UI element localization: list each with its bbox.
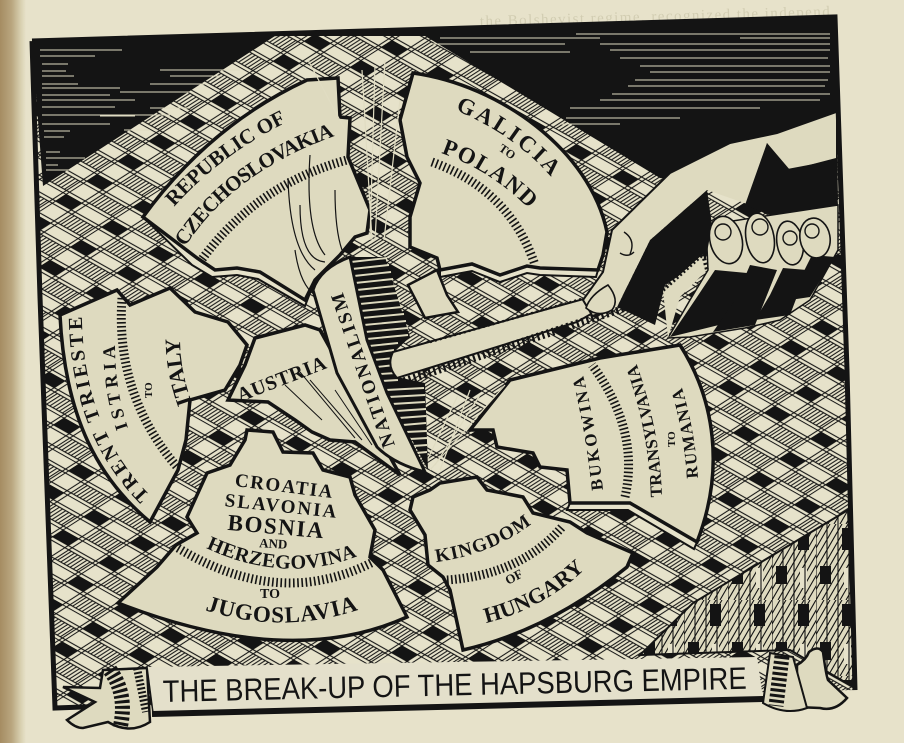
- title text: THE BREAK-UP OF THE HAPSBURG EMPIRE: [162, 661, 747, 709]
- table side face: [640, 510, 855, 688]
- shard: Austria: [225, 323, 402, 476]
- title banner: [147, 657, 764, 714]
- shard: Galicia to Poland: POLAND: [442, 139, 536, 206]
- shard: Bukowina, Transylvania to Rumania: TO: [666, 431, 678, 447]
- shard: Trent, Trieste, Istria to Italy: TRENT TRIESTE: [68, 318, 148, 504]
- shard: Croatia, Slavonia, Bosnia, Herzegovina to Jugoslavia: HERZEGOVINA: [206, 536, 358, 569]
- shard: Trent, Trieste, Istria to Italy: ITALY: [166, 340, 192, 407]
- shard: Galicia to Poland: [398, 71, 609, 283]
- shard: Bukowina, Transylvania to Rumania: [466, 343, 715, 550]
- shard: Croatia, Slavonia, Bosnia, Herzegovina to Jugoslavia: BOSNIA: [227, 510, 325, 543]
- shard: Republic of Czechoslovakia: CZECHOSLOVAKIA: [176, 125, 334, 244]
- shard: Croatia, Slavonia, Bosnia, Herzegovina to Jugoslavia: TO: [260, 587, 280, 602]
- hand gripping the hammer: [583, 112, 838, 338]
- hammer labelled Nationalism: NATIONALISM: [331, 292, 395, 449]
- scroll end: right: [763, 648, 847, 711]
- arm and palm: [583, 112, 836, 315]
- shard: Galicia to Poland: GALICIA: [458, 98, 558, 177]
- shard: Bukowina, Transylvania to Rumania: TRANSYLVANIA: [628, 364, 662, 498]
- shard: Kingdom of Hungary: OF: [502, 566, 525, 588]
- cuff shadow: [745, 143, 838, 215]
- shard: Republic of Czechoslovakia: REPUBLIC OF: [164, 110, 282, 206]
- shard: Bukowina, Transylvania to Rumania: RUMANIA: [672, 388, 698, 478]
- black background sky: [32, 17, 838, 200]
- shard: Trent, Trieste, Istria to Italy: ISTRIA: [103, 346, 128, 431]
- shard: Croatia, Slavonia, Bosnia, Herzegovina to Jugoslavia: CROATIA: [234, 470, 334, 503]
- shard: Kingdom of Hungary: KINGDOM: [434, 514, 532, 562]
- hammer labelled Nationalism: [312, 255, 624, 472]
- shard: Croatia, Slavonia, Bosnia, Herzegovina to Jugoslavia: [114, 428, 410, 642]
- book gutter shading: [0, 0, 26, 743]
- dark finger shadows: [670, 270, 747, 337]
- shard: Republic of Czechoslovakia: [140, 76, 372, 308]
- shard: Kingdom of Hungary: [408, 475, 634, 652]
- white engraved lines in sky: [40, 34, 830, 170]
- hammer handle: [390, 298, 605, 378]
- hammer head ribbed side: [350, 257, 428, 470]
- faint show-through text: the Bolshevist regime, recognized the independ: [480, 4, 830, 30]
- shard: Croatia, Slavonia, Bosnia, Herzegovina to Jugoslavia: JUGOSLAVIA: [206, 596, 358, 623]
- impact crack lines: [308, 60, 505, 470]
- shard: Bukowina, Transylvania to Rumania: BUKOWINA: [574, 376, 603, 491]
- shard: Trent, Trieste, Istria to Italy: [58, 286, 249, 525]
- shadow between palm and fingers: [617, 190, 712, 325]
- small cracked fragment: [408, 270, 458, 318]
- thumb: [586, 285, 615, 314]
- cream underside of fingers: [668, 205, 838, 338]
- impact motion lines: [288, 155, 342, 295]
- shard: Trent, Trieste, Istria to Italy: TO: [143, 382, 155, 398]
- shard: Galicia to Poland: TO: [496, 141, 518, 162]
- shard: Austria: AUSTRIA: [240, 358, 328, 399]
- gap between thumb and fingers: [663, 254, 707, 338]
- shard: Croatia, Slavonia, Bosnia, Herzegovina to Jugoslavia: SLAVONIA: [224, 490, 338, 523]
- shard: Croatia, Slavonia, Bosnia, Herzegovina to Jugoslavia: AND: [259, 535, 288, 552]
- hammer head face: [313, 257, 425, 472]
- shard: Kingdom of Hungary: HUNGARY: [482, 558, 582, 623]
- scroll end: left: [63, 668, 150, 728]
- finger tips: [705, 213, 747, 267]
